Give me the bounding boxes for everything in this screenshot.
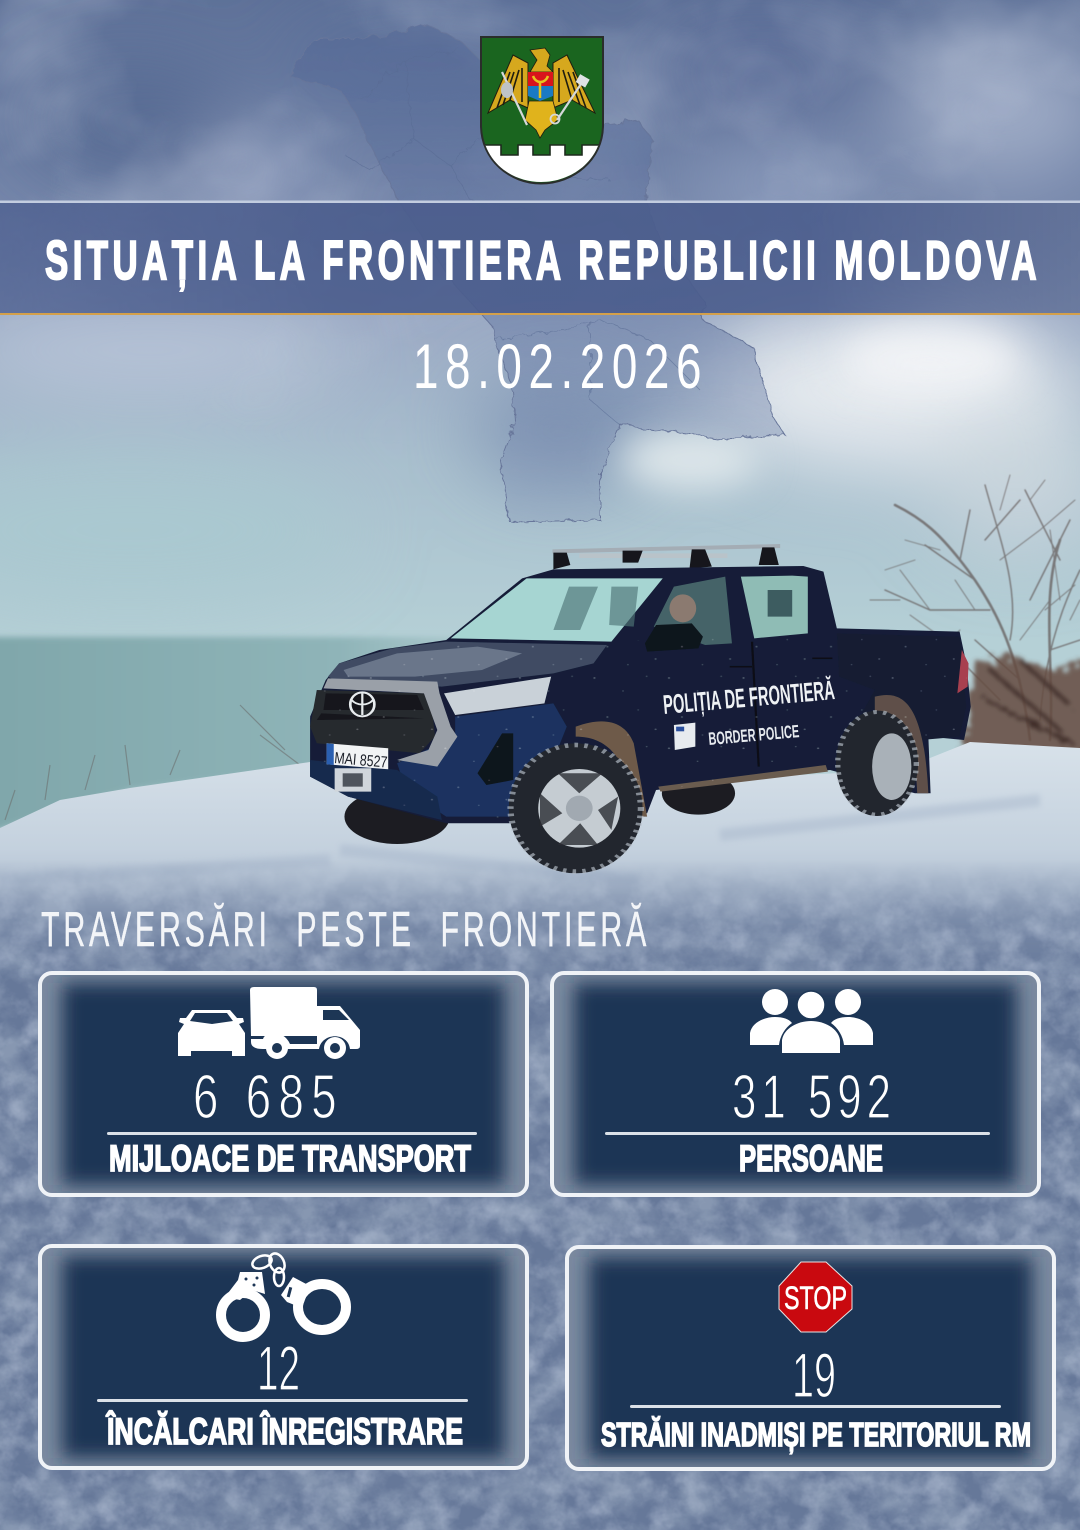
fog light (477, 733, 513, 785)
title band (0, 200, 1080, 315)
map of Moldova (290, 23, 785, 522)
label: ÎNCĂLCARI ÎNREGISTRARE (106, 1410, 463, 1452)
hood snow (344, 647, 522, 677)
value: 6 685 (193, 1063, 344, 1132)
door line (730, 642, 832, 767)
door mud strip (658, 765, 828, 792)
wing feathers (497, 68, 586, 108)
door text: Border Police: BORDER POLICE (708, 721, 800, 749)
far rear wheel (662, 772, 735, 815)
number plate (327, 743, 388, 769)
toyota emblem inner (352, 693, 373, 715)
eagle wings (488, 55, 595, 113)
icon: stop sign (779, 1262, 852, 1332)
sea (0, 637, 460, 835)
bare tree (870, 475, 1080, 740)
section heading: TRAVERSĂRI PESTE FRONTIERĂ (41, 903, 650, 957)
headlight (444, 677, 551, 715)
roof rack (552, 544, 780, 569)
winch (335, 768, 371, 792)
panel: persoane (550, 971, 1041, 1197)
dry grass (5, 705, 300, 820)
value: 31 592 (732, 1063, 896, 1132)
logo (350, 692, 374, 716)
background: winter sky, sea, snow (0, 0, 1080, 828)
bumper lower (310, 760, 442, 820)
seats and mirror inside (553, 587, 638, 630)
coat of arms (480, 37, 604, 190)
chrome trim (323, 678, 457, 767)
door text: Poliția de Frontieră: POLIȚIA DE FRONTIERĂ (662, 674, 836, 720)
value: 12 (257, 1334, 300, 1404)
panel: straini inadmisi (565, 1245, 1056, 1471)
eagle head (530, 48, 553, 72)
front side window (654, 577, 732, 645)
value: 19 (792, 1341, 836, 1411)
snow field (0, 742, 1080, 980)
mirror (645, 623, 703, 652)
police pickup truck (310, 544, 971, 873)
lower front blue panel (397, 703, 567, 817)
door sticker (674, 723, 695, 750)
cab and body (310, 566, 971, 823)
heraldic shield red (528, 72, 553, 86)
tail light (957, 650, 969, 693)
shield field (481, 37, 603, 184)
panel: mijloace de transport (38, 971, 529, 1197)
winch inner (343, 773, 363, 787)
key bow (550, 114, 560, 124)
eagle tail (525, 101, 558, 138)
icon: handcuffs (221, 1251, 346, 1337)
windshield (451, 578, 663, 642)
rear wheel (836, 711, 918, 816)
mottled stone band at bottom (0, 860, 1080, 1530)
label: PERSOANE (739, 1138, 883, 1179)
brown shrubs (960, 655, 1080, 755)
rear side window (741, 576, 808, 638)
white base with battlements (485, 144, 598, 182)
driver (669, 594, 696, 622)
bed (837, 633, 966, 747)
icon: stop sign: STOP (784, 1280, 847, 1316)
axe head (501, 82, 513, 98)
sword and key (502, 72, 585, 125)
icon: people (750, 989, 873, 1053)
heraldic shield blue (528, 86, 553, 101)
date: 18.02.2026 (413, 332, 708, 402)
plate flag strip (327, 743, 334, 765)
hood (328, 642, 607, 687)
front grille area (310, 690, 435, 753)
snow specks (310, 628, 971, 823)
panel: incalcari (38, 1244, 529, 1470)
far front wheel (344, 789, 450, 844)
snow tyre tracks (0, 800, 1040, 880)
mud arches (576, 721, 647, 817)
front wheel (509, 743, 643, 873)
icon: car and truck (178, 987, 360, 1059)
plate text: MAI 8527 (334, 750, 388, 772)
aurochs (533, 76, 548, 98)
key bit (576, 74, 590, 87)
EU sticker (676, 727, 684, 731)
label: MIJLOACE DE TRANSPORT (109, 1138, 471, 1179)
